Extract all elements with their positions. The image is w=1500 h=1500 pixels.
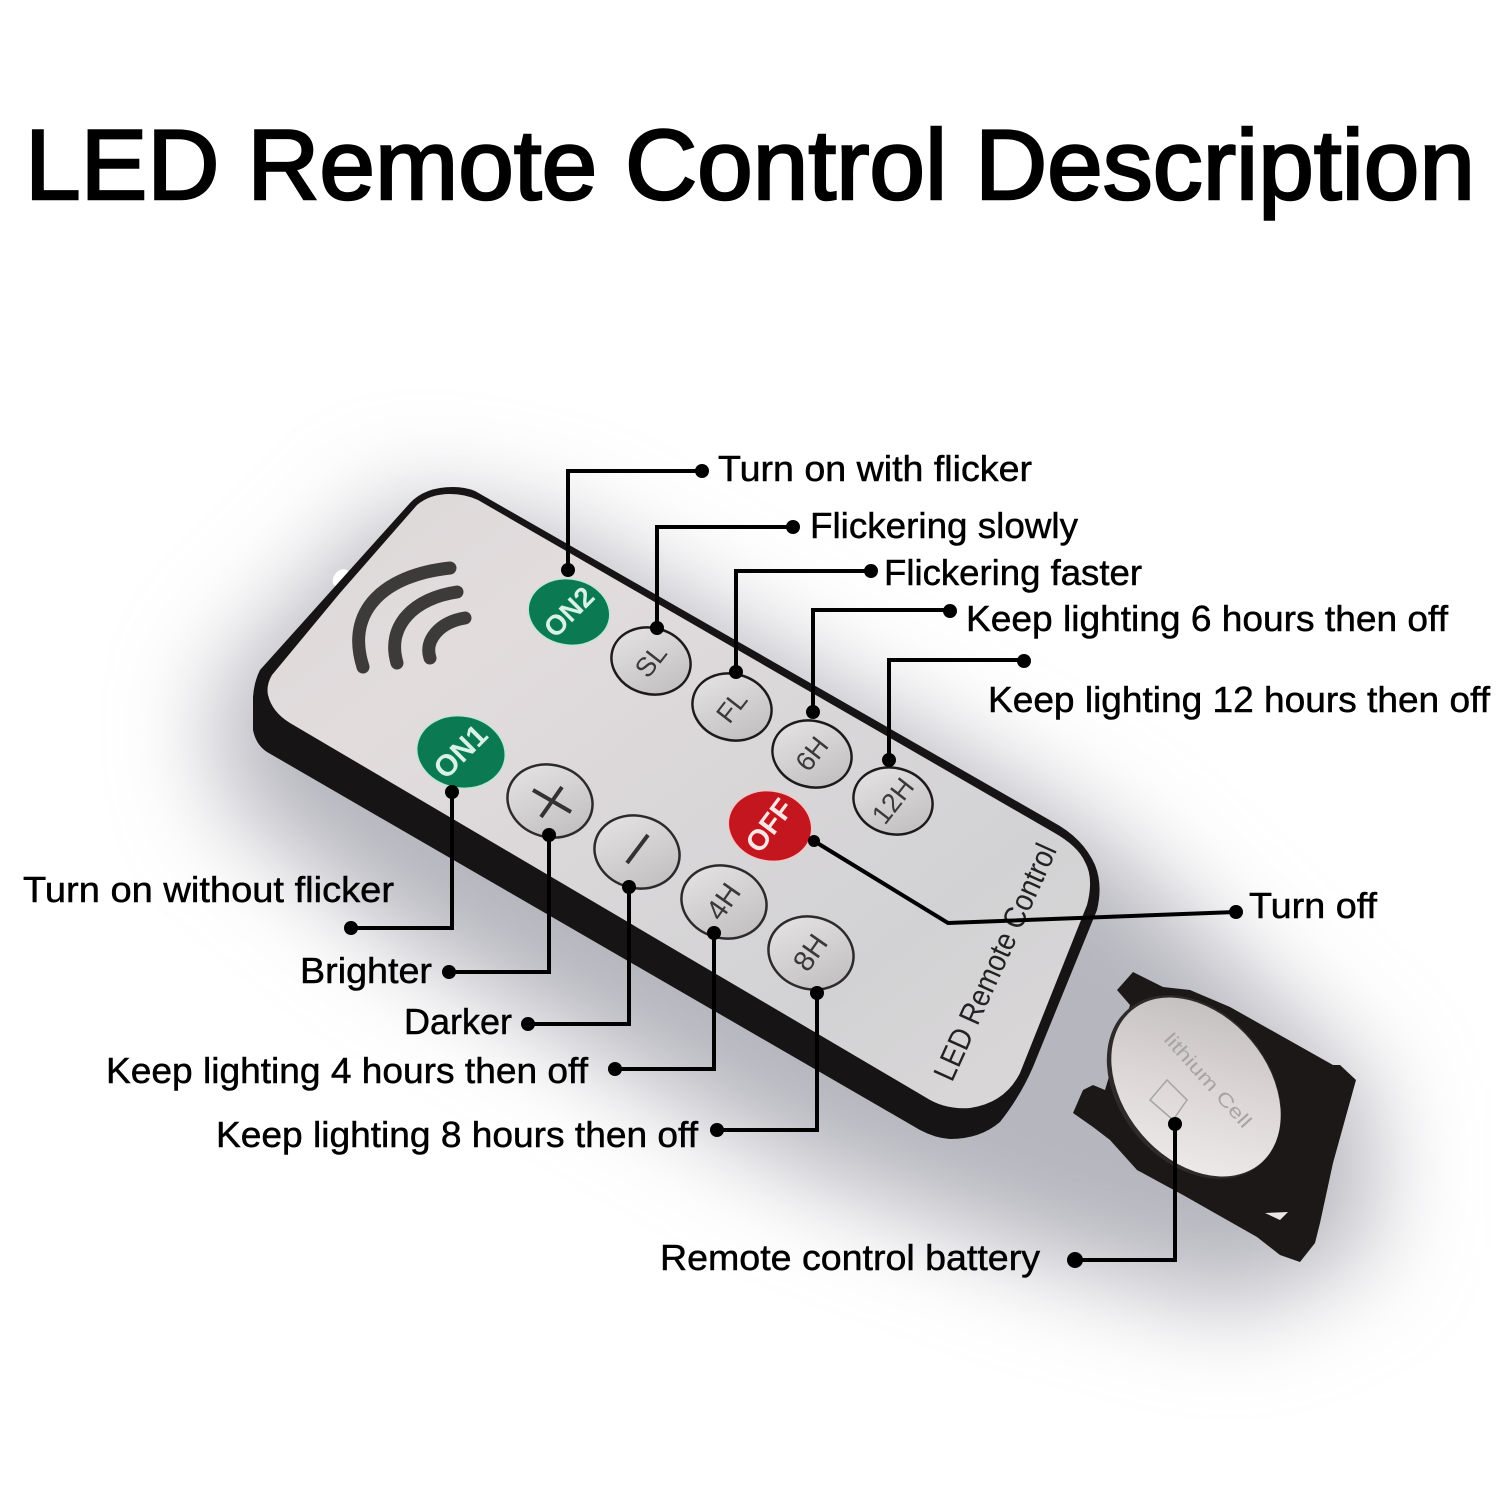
callout: turn on without flicker <box>23 785 459 935</box>
button: FL: FL <box>710 685 754 729</box>
callout: brighter <box>300 828 556 991</box>
button: 8H: 8H <box>787 929 835 977</box>
side button bump <box>329 566 353 590</box>
callout: flickering slowly <box>650 505 1078 635</box>
callout: turn on without flicker: Turn on without flicker <box>23 869 394 910</box>
callout: keep lighting 4 hours: Keep lighting 4 hours then off <box>106 1050 589 1091</box>
button: 8H <box>760 907 862 999</box>
callout: flickering faster: Flickering faster <box>884 552 1142 593</box>
callout: keep lighting 4 hours <box>106 926 721 1091</box>
button: OFF <box>722 783 818 869</box>
button: 6H: 6H <box>790 731 834 777</box>
button: minus <box>586 806 688 898</box>
title: LED Remote Control Description <box>25 109 1475 220</box>
callout: darker: Darker <box>404 1001 512 1042</box>
callout: remote control battery: Remote control battery <box>660 1237 1040 1278</box>
remote body <box>253 487 1100 1139</box>
callout: turn off <box>808 835 1378 926</box>
button: ON2 <box>523 572 615 652</box>
background shadow <box>215 500 1370 1310</box>
button: 6H <box>765 712 859 796</box>
callout: remote control battery <box>660 1117 1182 1278</box>
callout: flickering faster <box>729 552 1142 679</box>
icon: signal waves <box>359 568 465 667</box>
button: 12H: 12H <box>866 772 920 830</box>
callout: brighter: Brighter <box>300 950 432 991</box>
battery holder <box>1071 961 1356 1262</box>
button: ON1: ON1 <box>428 719 494 785</box>
button: SL <box>604 619 698 703</box>
remote brand text: LED Remote Control <box>926 838 1064 1086</box>
callout: flickering slowly: Flickering slowly <box>810 505 1078 546</box>
tray highlight <box>1265 1212 1288 1220</box>
battery tray <box>1073 972 1356 1262</box>
button: FL <box>685 665 779 749</box>
button: SL: SL <box>629 639 673 683</box>
callout: keep lighting 6 hours: Keep lighting 6 hours then off <box>966 598 1449 639</box>
coin cell <box>1071 961 1317 1213</box>
button: OFF: OFF <box>740 793 800 859</box>
callout: keep lighting 6 hours <box>806 598 1449 719</box>
button: plus <box>499 755 601 847</box>
callout: keep lighting 12 hours: Keep lighting 12 hours then off <box>988 679 1491 720</box>
button: 4H <box>673 856 775 948</box>
button: ON2: ON2 <box>538 581 600 643</box>
callout: keep lighting 8 hours: Keep lighting 8 hours then off <box>216 1114 699 1155</box>
callout: turn on with flicker: Turn on with flicker <box>718 448 1032 489</box>
callout: turn on with flicker <box>561 448 1032 577</box>
button: ON1 <box>411 709 511 795</box>
remote face <box>268 494 1090 1108</box>
callout: keep lighting 12 hours <box>882 654 1491 767</box>
callout: keep lighting 8 hours <box>216 986 824 1155</box>
button: 4H: 4H <box>700 878 748 926</box>
coin cell engraving: lithium Cell <box>1159 1029 1255 1133</box>
button: 12H <box>846 759 940 843</box>
remote control <box>253 487 1100 1139</box>
callout: darker <box>404 880 636 1042</box>
callout: turn off: Turn off <box>1249 885 1378 926</box>
